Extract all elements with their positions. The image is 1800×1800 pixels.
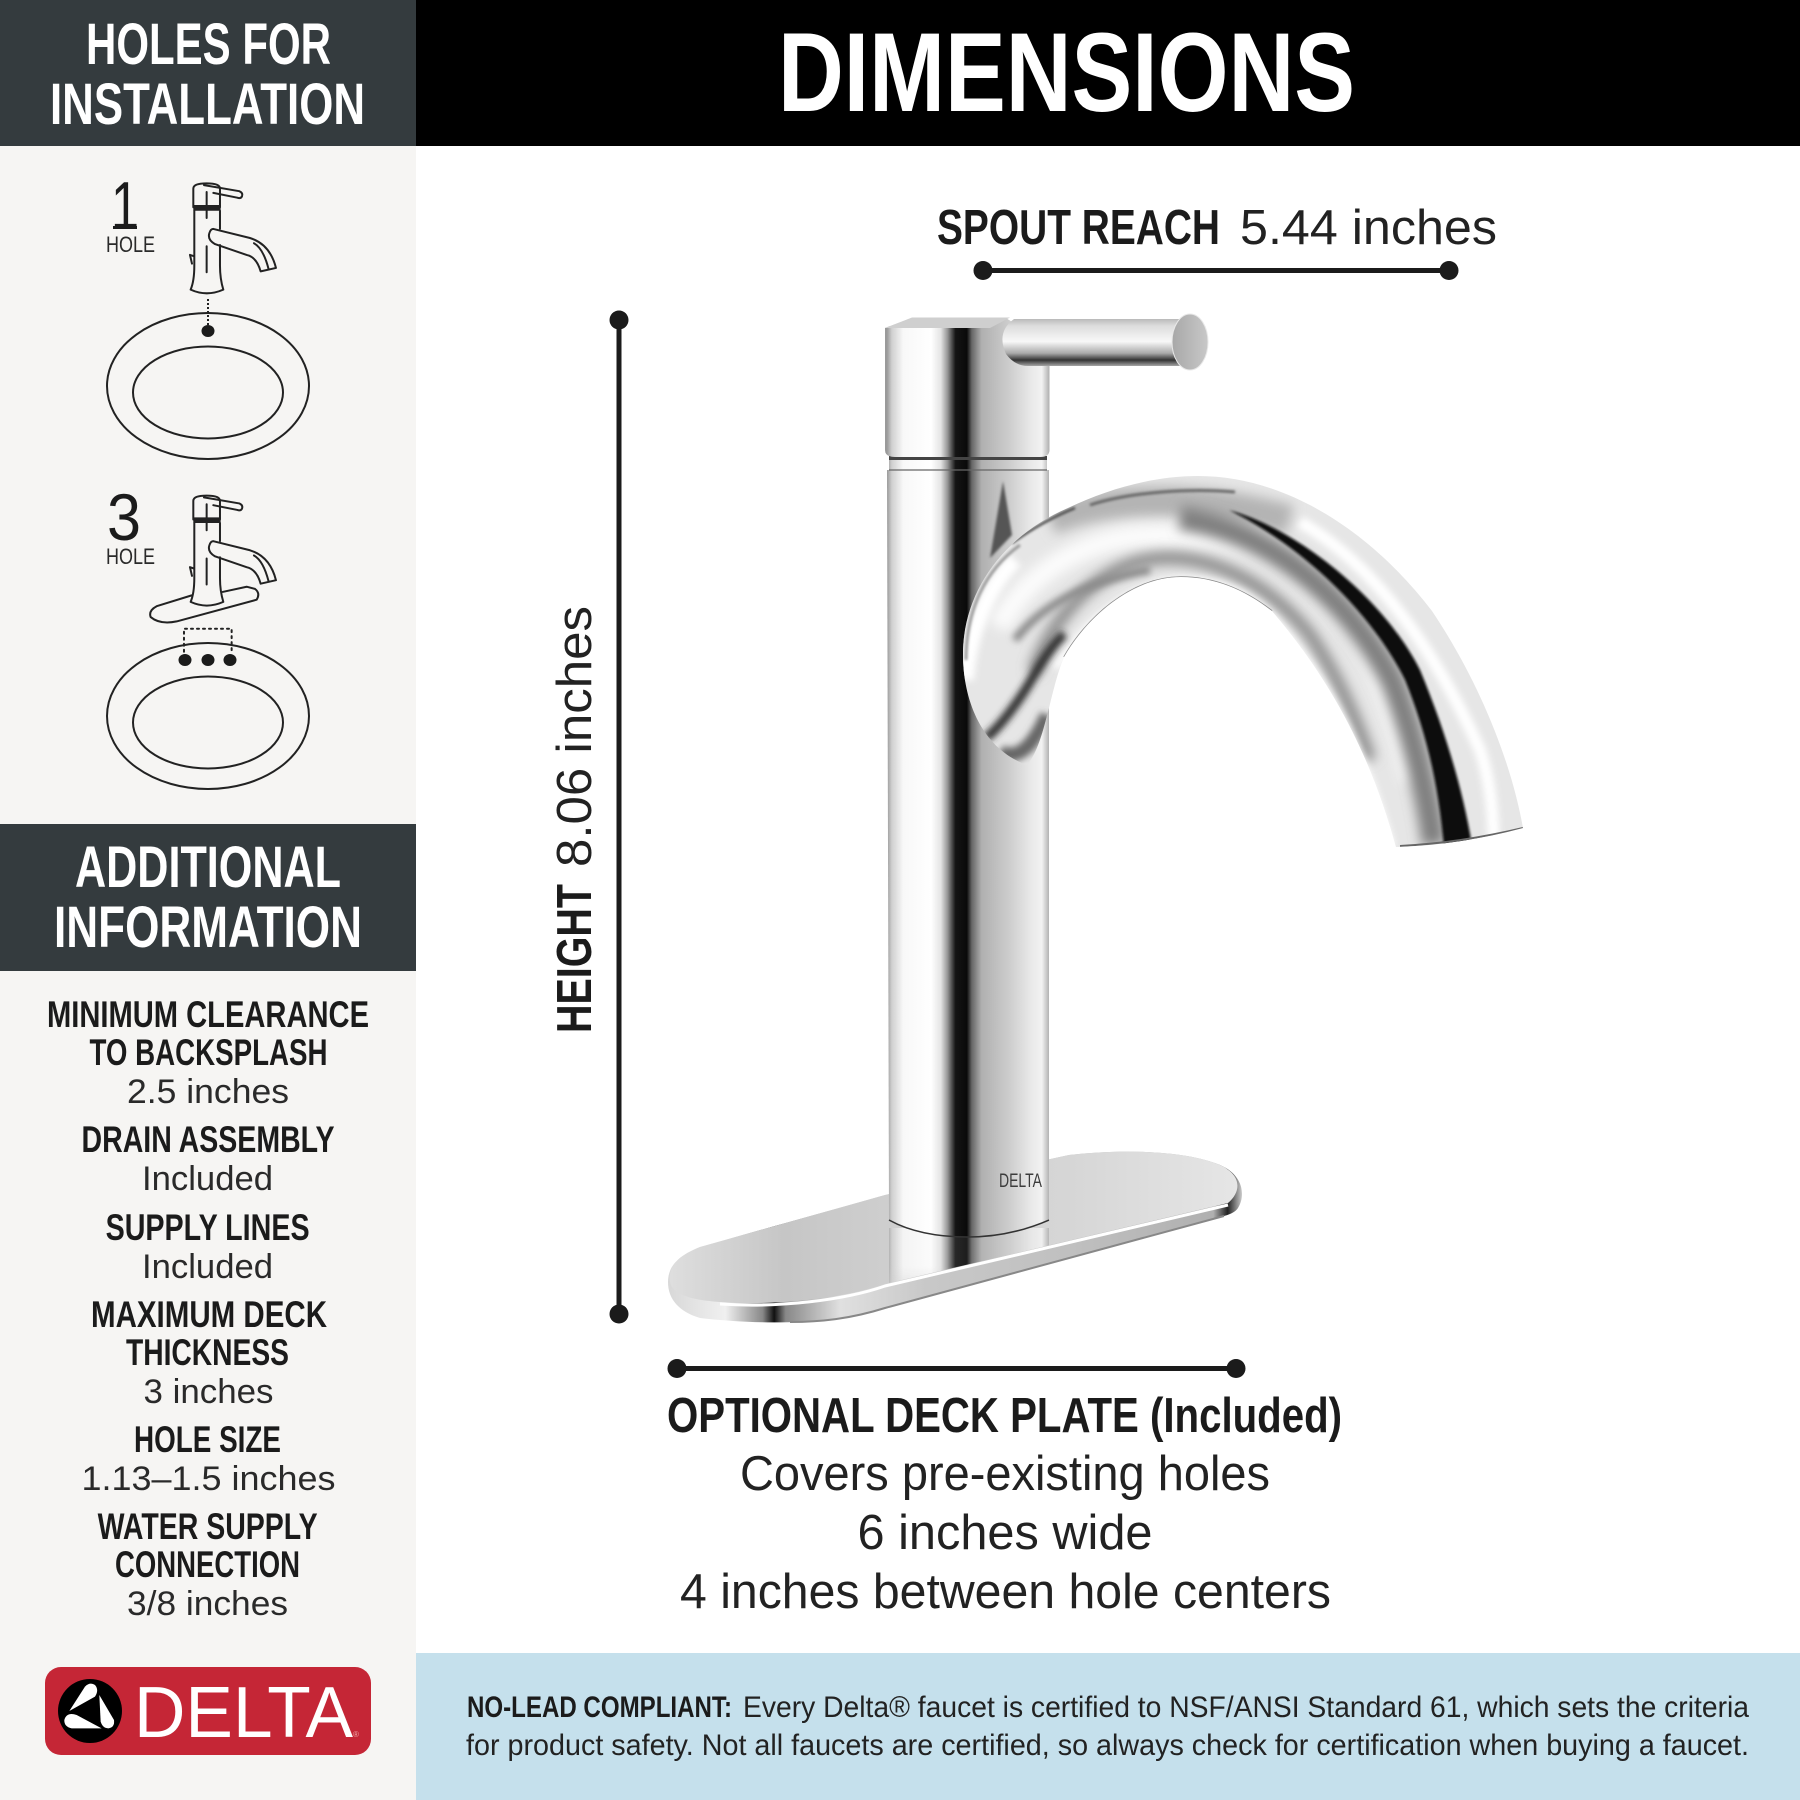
text block: optional deck plate: OPTIONAL DECK PLATE (Included) — [667, 1389, 1342, 1443]
callout: no-lead compliant — [416, 1653, 1800, 1800]
text block: drain assembly: DRAIN ASSEMBLY — [82, 1119, 335, 1160]
callout: no-lead compliant: NO-LEAD COMPLIANT: — [467, 1691, 732, 1724]
height label: HEIGHT — [548, 884, 602, 1033]
text block: minimum clearance: 2.5 inches — [127, 1073, 289, 1111]
dimension line: spout reach — [974, 261, 1458, 280]
logo: Delta: ® — [353, 1730, 359, 1739]
dimension line: height — [610, 310, 628, 1324]
text block: maximum deck thickness: 3 inches — [144, 1373, 274, 1411]
icon: 3 hole sink — [107, 643, 309, 789]
text block: supply lines — [106, 1207, 310, 1286]
icon: 1 hole number — [106, 168, 155, 257]
dimension line: deck plate — [668, 1359, 1246, 1378]
lever handle — [1002, 314, 1208, 370]
text block: optional deck plate: 6 inches wide — [858, 1506, 1152, 1560]
text block: maximum deck thickness: THICKNESS — [126, 1332, 289, 1373]
text block: water supply connection: 3/8 inches — [127, 1585, 288, 1623]
heading: additional information: ADDITIONAL — [75, 835, 341, 900]
icon: 1 hole number: HOLE — [106, 232, 155, 257]
faucet column — [887, 470, 1049, 1237]
logo: Delta: DELTA — [134, 1673, 353, 1753]
callout: no-lead compliant: for product safety. Not all faucets are certified, so always check for certification when buying a faucet. — [466, 1729, 1749, 1762]
text block: water supply connection: WATER SUPPLY — [98, 1506, 318, 1547]
title banner — [416, 0, 1800, 146]
handle cap — [885, 318, 1050, 457]
height label — [548, 606, 602, 1033]
brand mark on faucet: DELTA — [999, 1171, 1042, 1192]
text block: optional deck plate — [667, 1389, 1342, 1619]
text block: drain assembly — [82, 1119, 335, 1198]
icon: 3 hole number — [106, 480, 155, 569]
heading: holes for installation — [0, 0, 416, 146]
text block: minimum clearance — [47, 994, 369, 1111]
height label: 8.06 inches — [548, 606, 602, 867]
icon: 3 hole number: 3 — [107, 480, 141, 554]
text block: maximum deck thickness: MAXIMUM DECK — [91, 1294, 327, 1335]
spout reach label: SPOUT REACH — [937, 201, 1220, 255]
text block: optional deck plate: Covers pre-existing holes — [740, 1447, 1270, 1501]
text block: supply lines: SUPPLY LINES — [106, 1207, 310, 1248]
icon: 3 hole faucet with deck plate — [150, 496, 276, 652]
heading: holes for installation: HOLES FOR — [86, 12, 331, 77]
text block: hole size: HOLE SIZE — [134, 1419, 281, 1460]
product photo: chrome faucet — [668, 314, 1523, 1322]
panel: left sidebar — [0, 0, 416, 1800]
heading: holes for installation: INSTALLATION — [50, 72, 365, 137]
text block: minimum clearance: TO BACKSPLASH — [90, 1032, 328, 1073]
text block: hole size — [82, 1419, 336, 1498]
icon: 3 hole number: HOLE — [106, 544, 155, 569]
spout reach label — [937, 201, 1497, 255]
text block: optional deck plate: 4 inches between hole centers — [680, 1565, 1331, 1619]
arched spout — [963, 476, 1523, 848]
title banner: DIMENSIONS — [778, 10, 1355, 135]
heading: additional information — [0, 824, 416, 971]
icon: 1 hole sink — [107, 299, 309, 459]
callout: no-lead compliant: Every Delta® faucet is certified to NSF/ANSI Standard 61, which sets the criteria — [743, 1691, 1749, 1724]
logo: Delta — [45, 1667, 371, 1755]
text block: supply lines: Included — [142, 1248, 273, 1286]
icon: 1 hole faucet — [190, 183, 276, 293]
text block: maximum deck thickness — [91, 1294, 327, 1411]
text block: drain assembly: Included — [142, 1160, 273, 1198]
spout reach label: 5.44 inches — [1240, 201, 1497, 255]
text block: water supply connection — [98, 1506, 318, 1623]
text block: water supply connection: CONNECTION — [115, 1544, 300, 1585]
icon: 1 hole number: 1 — [111, 168, 139, 244]
text block: hole size: 1.13–1.5 inches — [82, 1460, 336, 1498]
text block: minimum clearance: MINIMUM CLEARANCE — [47, 994, 369, 1035]
collar ring — [889, 456, 1047, 470]
deck plate — [668, 1152, 1242, 1322]
heading: additional information: INFORMATION — [54, 895, 362, 960]
